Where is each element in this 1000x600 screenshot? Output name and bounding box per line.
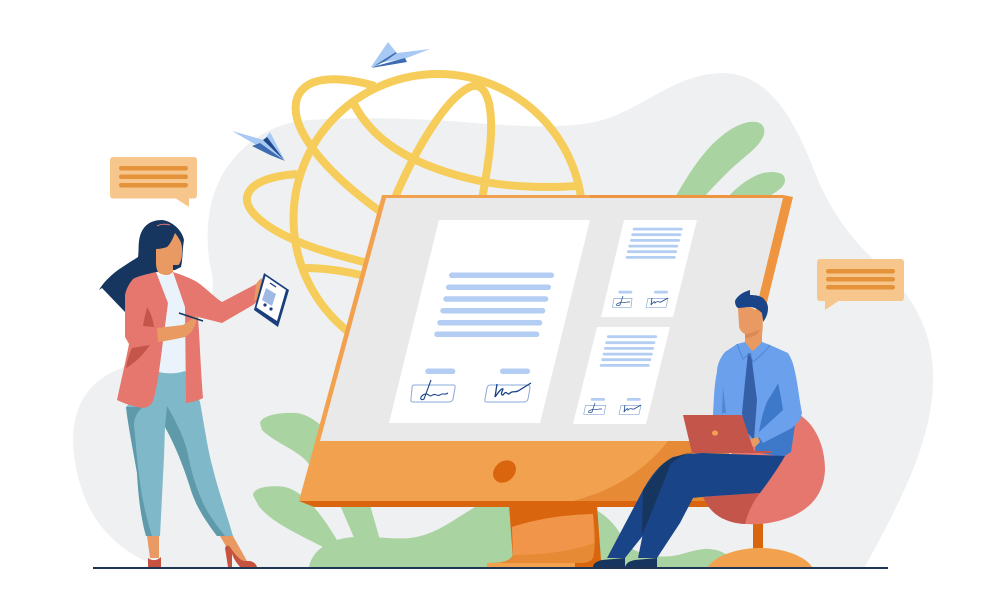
shoes (148, 546, 257, 567)
hand (750, 437, 760, 447)
woman (99, 220, 289, 567)
lower latitude curve (304, 268, 365, 276)
trouser shading (126, 406, 225, 536)
forearm and hand (157, 315, 197, 342)
text lines (425, 272, 554, 374)
monitor frame right (590, 195, 793, 505)
plant bush behind right of stand (590, 508, 735, 567)
speech bubble: left (110, 157, 197, 207)
speech bubble: right (817, 259, 904, 310)
upper orbit loop (296, 79, 385, 215)
chin shade (573, 441, 730, 501)
meridian curve (394, 86, 491, 200)
small document: top (601, 220, 697, 317)
jacket left (117, 272, 168, 408)
hand holding tablet (254, 278, 263, 301)
hair (99, 220, 184, 312)
background blob (73, 73, 933, 567)
globe (247, 74, 582, 363)
plant leaves behind monitor, upper right (676, 122, 785, 196)
chair base (708, 548, 812, 567)
far leg shading (642, 452, 693, 533)
shirt (156, 272, 185, 373)
lower leaf (253, 486, 337, 547)
signature boxes (584, 403, 641, 414)
shirt folds (759, 383, 783, 432)
near leg (638, 453, 785, 558)
globe outline (294, 74, 582, 363)
jacket shading (126, 307, 154, 368)
ground bush (309, 505, 513, 567)
latitude curve (354, 104, 578, 187)
monitor stand (487, 505, 601, 567)
chair seat (703, 415, 825, 524)
plant leaves behind monitor, lower left (253, 413, 513, 567)
collar (737, 344, 770, 362)
tie (742, 353, 757, 440)
shirt lower shade (755, 425, 795, 457)
signature boxes (612, 296, 668, 307)
far leg (607, 453, 693, 558)
monitor frame left (299, 195, 600, 501)
hair (735, 290, 768, 322)
neck and face (156, 233, 182, 275)
monitor chin (299, 441, 730, 501)
signature boxes (411, 380, 531, 402)
monitor (299, 195, 793, 507)
chin underside (299, 501, 717, 507)
lower orbit loop (247, 174, 375, 265)
trousers (126, 371, 233, 536)
chair leg (753, 522, 763, 550)
tablet (254, 273, 289, 327)
laptop (683, 415, 772, 453)
large document (389, 220, 590, 423)
pen (179, 313, 203, 321)
neck shadow (745, 330, 760, 338)
legs and ankles (147, 536, 247, 561)
stem (340, 505, 380, 540)
hairline tint (157, 224, 170, 226)
jacket right and sleeve (173, 272, 262, 403)
shoes (593, 558, 657, 567)
upper leaf (260, 413, 330, 480)
paper plane: left (232, 131, 285, 161)
ground line (93, 567, 888, 569)
neck and face (738, 307, 763, 351)
text lines (591, 335, 657, 401)
paper plane: top (371, 42, 430, 68)
shirt body (713, 342, 802, 446)
screen (320, 198, 783, 441)
camera dot (489, 456, 520, 487)
small document: bottom (573, 327, 670, 424)
left arm fold (722, 387, 726, 413)
man on chair (593, 290, 825, 567)
text lines (618, 228, 683, 294)
chair shadow (703, 493, 760, 524)
